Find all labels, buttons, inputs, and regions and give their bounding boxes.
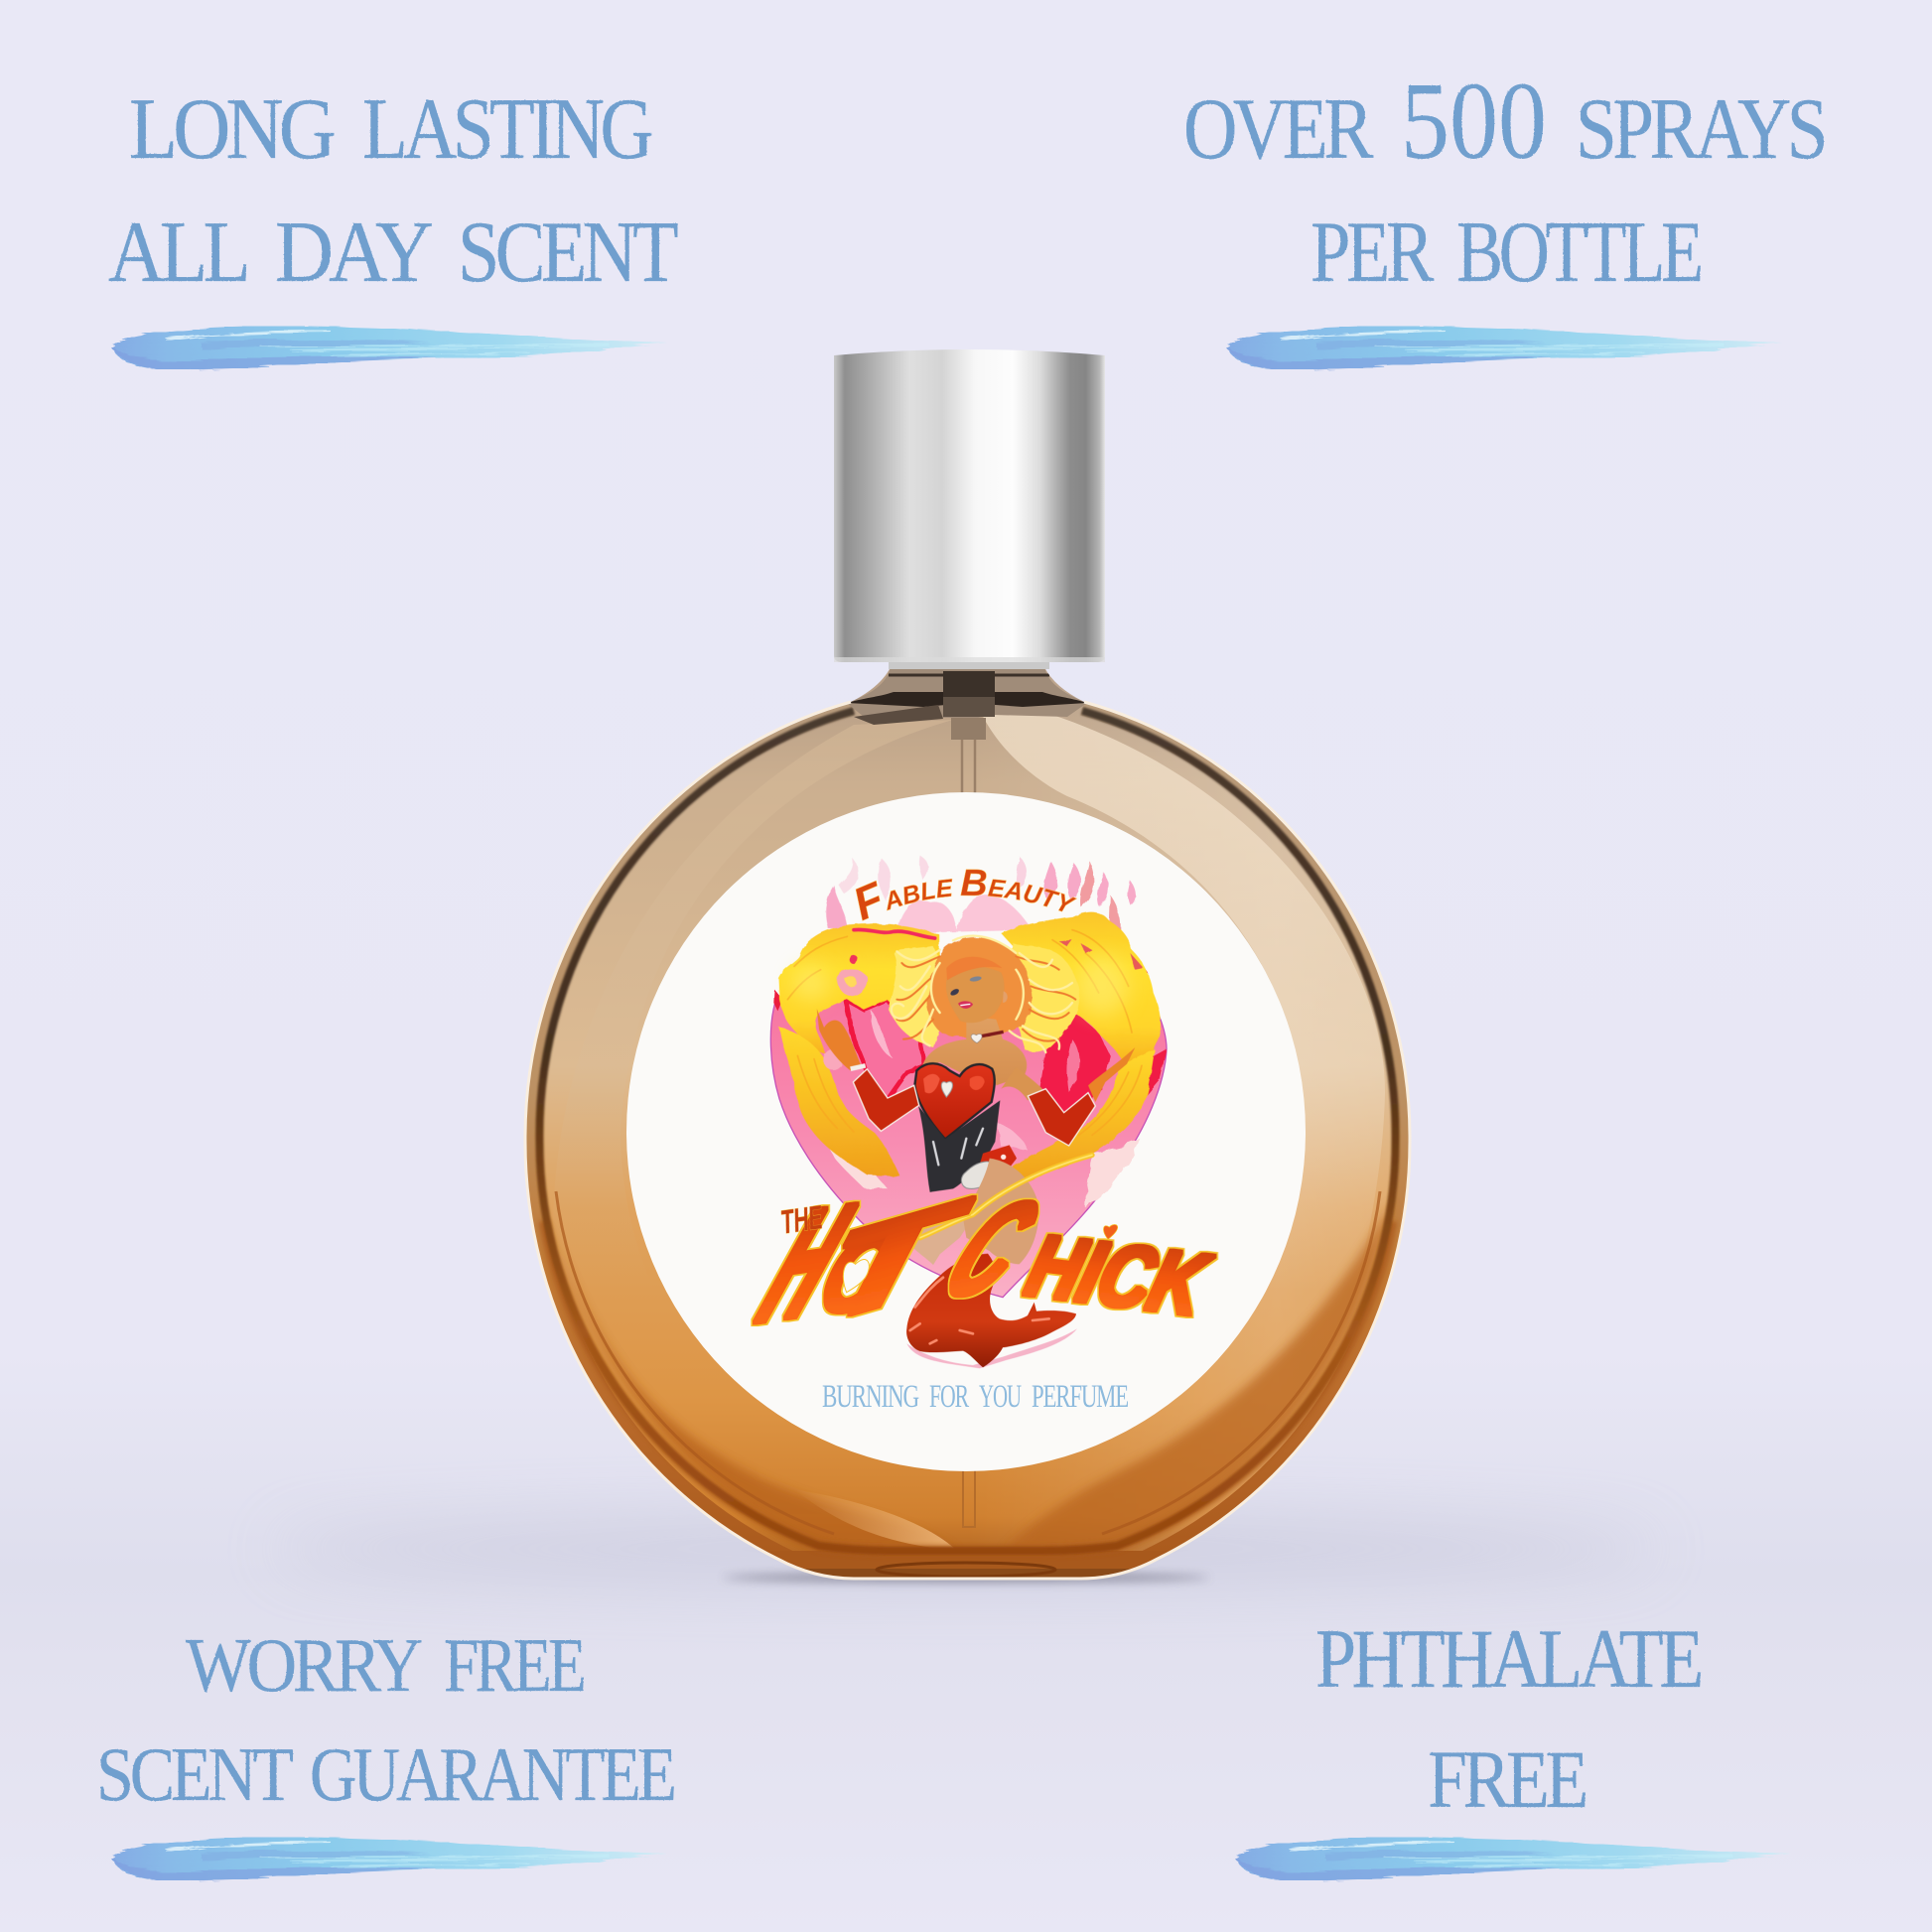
light reflection on right shoulder: [983, 715, 1385, 1247]
panel: over 500 sprays per bottle: [1183, 61, 1824, 369]
lighter wedge lower left: [812, 1493, 953, 1547]
bright flame glow: [792, 956, 1129, 1016]
right upper arm: [1001, 1067, 1062, 1115]
letters with yellow outline: H: [730, 1168, 882, 1359]
letters with yellow outline: HICK: [1011, 1216, 1226, 1333]
lower figure: [730, 1155, 1226, 1368]
heading: worry free: [186, 1622, 584, 1708]
heading: per bottle: [1311, 205, 1701, 301]
heart buckle: [961, 1162, 996, 1188]
product name: burning for you perfume: BURNING: [822, 1379, 919, 1415]
upper left inner reflection: [797, 720, 951, 760]
left lower ribbon: [779, 1028, 900, 1176]
heading: all day scent: [108, 205, 678, 301]
heading: worry free: FREE: [444, 1622, 584, 1708]
brush stroke underline: [1227, 327, 1783, 369]
perfume bottle: [524, 349, 1412, 1581]
hair mass: [889, 936, 1079, 1052]
right hand: [1088, 1047, 1135, 1102]
product name: burning for you perfume: FOR: [929, 1379, 969, 1415]
upper dip tube and collar: [951, 718, 986, 794]
silver cap: [834, 349, 1105, 662]
face: [946, 957, 1008, 1023]
orange strands: [897, 956, 1075, 1041]
lower rim glow: [544, 1221, 1392, 1551]
heading: long lasting: LONG: [129, 81, 334, 178]
letters with yellow outline: T: [784, 1167, 993, 1359]
heading: phthalate: PHTHALATE: [1315, 1612, 1701, 1706]
left glove: [853, 1069, 919, 1131]
heading: over 500 sprays: SPRAYS: [1576, 81, 1824, 178]
right flame lobe: [1001, 911, 1161, 1065]
product name: burning for you perfume: [822, 1379, 1128, 1415]
flame texture lines: [787, 930, 1142, 1135]
right glove: [1028, 1089, 1095, 1146]
heading: scent guarantee: GUARANTEE: [310, 1731, 674, 1817]
glass body: [516, 655, 1423, 1588]
boot shadow: [906, 1328, 1077, 1368]
collar ring: [889, 660, 1049, 669]
neck and shoulders: [921, 1016, 1027, 1085]
heading: over 500 sprays: OVER: [1183, 81, 1374, 178]
heading: long lasting: LASTING: [362, 81, 651, 178]
heart over i: [1104, 1224, 1118, 1239]
heart in O: [843, 1260, 869, 1293]
neck shadows: [847, 667, 1087, 725]
floor shadow: [271, 1519, 1661, 1582]
brush stroke underline: [112, 327, 668, 369]
darker lower left band: [558, 1241, 905, 1543]
dark inner rim: [539, 711, 1396, 1551]
black corset: [918, 1100, 1000, 1192]
yellow flame streak: [920, 1155, 1092, 1238]
heading: worry free: WORRY: [186, 1622, 422, 1708]
heading: over 500 sprays: 500: [1401, 61, 1547, 183]
product name: burning for you perfume: YOU: [979, 1379, 1022, 1415]
yellow flame lobes: [778, 911, 1161, 1184]
outer rim band: [525, 702, 1410, 1579]
pale lower flames: [824, 1122, 1140, 1208]
brush stroke underline: [112, 1838, 668, 1880]
heading: scent guarantee: SCENT: [96, 1731, 293, 1817]
heading: all day scent: SCENT: [458, 205, 678, 301]
small the: THE: [778, 1199, 826, 1242]
left hand: [817, 1009, 866, 1070]
heading: all day scent: DAY: [275, 205, 432, 301]
left thigh: [910, 1211, 973, 1265]
heading: scent guarantee: [96, 1731, 674, 1817]
panel: long lasting all day scent: [108, 81, 678, 369]
right lower ribbon: [1008, 1049, 1155, 1184]
darker lower right band: [1003, 1201, 1392, 1553]
heading: per bottle: BOTTLE: [1456, 205, 1701, 301]
brush stroke underline: [1236, 1838, 1792, 1880]
heading: free: FREE: [1428, 1733, 1586, 1825]
panel: worry free scent guarantee: [96, 1622, 674, 1880]
label artwork: [730, 856, 1226, 1368]
label disc: [626, 792, 1306, 1471]
heading: per bottle: PER: [1311, 205, 1435, 301]
letters with yellow outline: C: [915, 1169, 1069, 1328]
title letters: hot chick: [730, 1167, 1226, 1359]
pink top flames: [826, 856, 1135, 933]
letters with yellow outline: O: [799, 1209, 920, 1338]
red corset top: [914, 1063, 995, 1139]
cream outer sheen: [525, 702, 1410, 1579]
secondary rim line: [556, 1191, 1380, 1534]
red waistband: [968, 1145, 1017, 1188]
letters with yellow outline: [730, 1167, 1226, 1359]
heading: all day scent: ALL: [108, 205, 246, 301]
red boots: [906, 1254, 1076, 1367]
panel: phthalate free: [1236, 1612, 1792, 1880]
heading: long lasting: [129, 81, 651, 178]
base band: [793, 1551, 1142, 1565]
product name: burning for you perfume: PERFUME: [1032, 1379, 1128, 1415]
yellow strands: [892, 936, 1072, 1052]
red flames: [773, 948, 1167, 1115]
pink streak along top of left lobe: [854, 929, 935, 938]
left flame lobe: [778, 923, 940, 1054]
lower dip tube: [963, 1469, 975, 1527]
pink heart: [770, 986, 1167, 1298]
base slot: [877, 1563, 1055, 1577]
heading: over 500 sprays: [1183, 61, 1824, 183]
right thigh: [963, 1159, 1039, 1264]
collar and pendant: [971, 1032, 1004, 1043]
floating petals: [823, 940, 1144, 1070]
boot highlights: [910, 1278, 1049, 1343]
brand text: fable beauty: FABLE BEAUTY: [856, 870, 1077, 921]
